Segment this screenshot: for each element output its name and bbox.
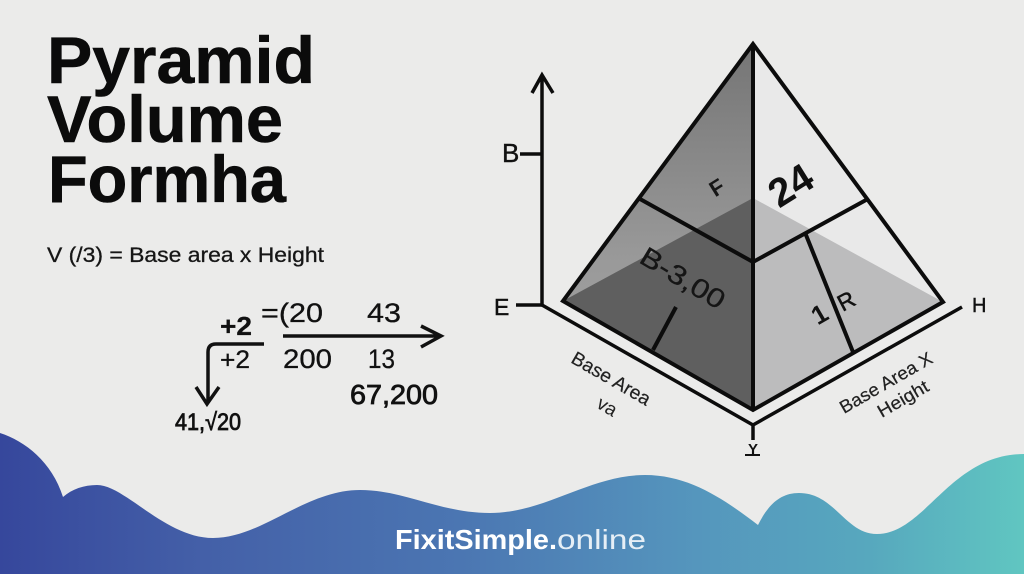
- label: F: F: [705, 173, 729, 202]
- shaded base: right: [753, 198, 943, 410]
- calculation numbers: 43: [367, 298, 401, 328]
- calculation numbers: 41,√20: [175, 409, 241, 436]
- tick: B: [520, 152, 542, 156]
- footer brand: FixitSimple.online: [395, 524, 646, 555]
- axis label: E: E: [494, 294, 509, 320]
- pyramid diagram: [563, 44, 943, 410]
- shaded base: left: [563, 198, 753, 410]
- worked calculation: [175, 298, 441, 436]
- right face: [753, 44, 943, 410]
- axes: [516, 75, 962, 440]
- label: R: R: [833, 286, 860, 316]
- left face: [563, 44, 753, 410]
- wave footer: [0, 433, 1024, 574]
- axis label: Y: [745, 441, 760, 458]
- label: 24: 24: [761, 155, 822, 216]
- axis label: H: H: [972, 295, 986, 317]
- axis label: Y: Y: [748, 441, 758, 458]
- pyramid outlines: [563, 44, 943, 410]
- title: [47, 23, 315, 216]
- title: Formha: [48, 142, 287, 216]
- title: Pyramid: [47, 23, 315, 97]
- calculation numbers: =(20: [261, 298, 323, 328]
- label: B-3,00: B-3,00: [635, 241, 731, 315]
- arrow: right: [283, 326, 441, 347]
- label: 1: 1: [806, 298, 833, 331]
- label: Base Area: Base Area: [567, 348, 654, 411]
- label: Base Area X: Base Area X: [836, 348, 936, 417]
- calculation numbers: +2: [220, 346, 250, 374]
- arrow: elbow down: [196, 344, 264, 404]
- tick: E: [516, 303, 542, 307]
- calculation numbers: 13: [368, 344, 395, 374]
- label: va: va: [593, 393, 621, 422]
- base axes: [542, 305, 962, 440]
- label: Height: Height: [874, 376, 932, 421]
- calculation numbers: [175, 298, 438, 436]
- formula text: V (/3) = Base area x Height: [47, 244, 324, 267]
- calculation numbers: +2: [220, 311, 252, 341]
- title: Volume: [47, 82, 283, 156]
- vertical axis arrow: [532, 75, 553, 305]
- calculation numbers: 200: [283, 344, 332, 374]
- calculation numbers: 67,200: [350, 379, 438, 410]
- axis label: B: B: [502, 138, 519, 168]
